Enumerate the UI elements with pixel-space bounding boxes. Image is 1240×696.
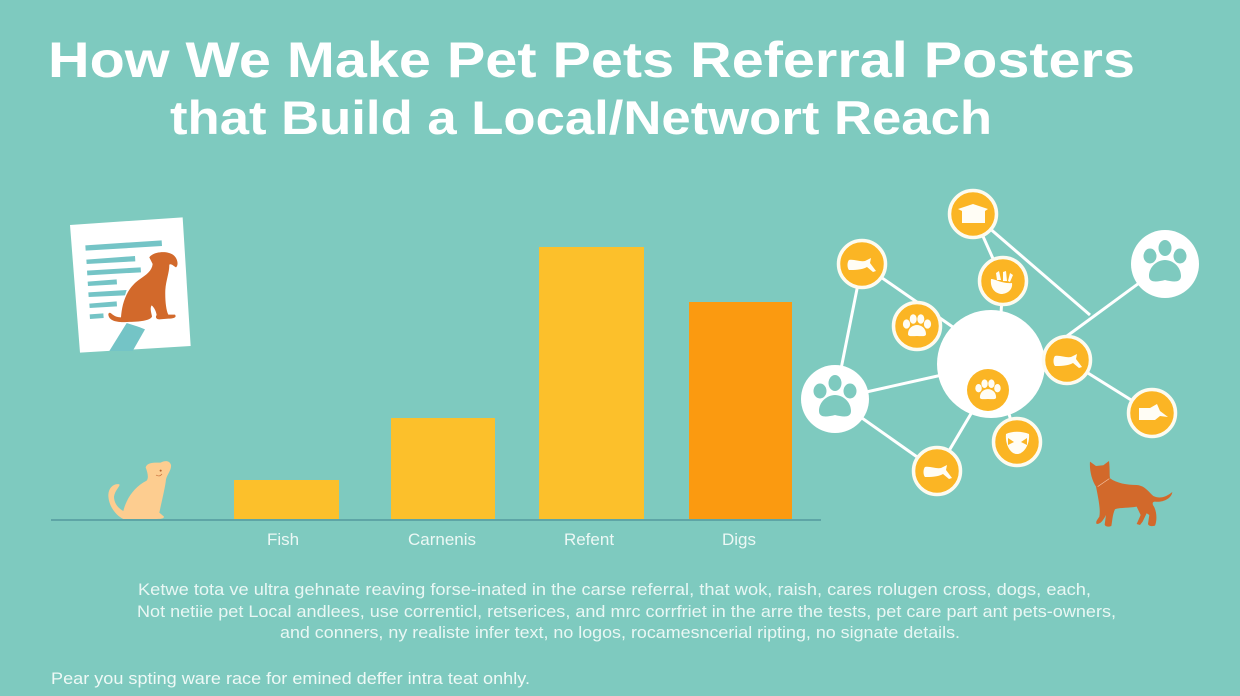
node: hub paw bbox=[967, 369, 1009, 411]
bar: Carnenis bbox=[391, 418, 495, 519]
icon: referral poster with dog bbox=[70, 217, 191, 353]
bar: Digs bbox=[689, 302, 792, 519]
axis labels: Digs bbox=[722, 530, 756, 549]
description text bbox=[137, 581, 1116, 642]
node: bone right bbox=[1044, 336, 1090, 384]
title: that Build a Local/Networt Reach bbox=[170, 91, 992, 144]
icon: standing orange dog bbox=[1090, 461, 1172, 527]
bar: Fish bbox=[234, 480, 339, 519]
icon: light dog bbox=[108, 461, 171, 519]
description text: and conners, ny realiste infer text, no logos, rocamesncerial ripting, no signate details. bbox=[280, 624, 960, 642]
node: bone far right bbox=[1128, 390, 1176, 436]
description text: Ketwe tota ve ultra gehnate reaving forse-inated in the carse referral, that wok, raish, cares rolugen cross, dogs, each, bbox=[138, 581, 1091, 599]
connector lines bbox=[835, 214, 1165, 471]
node: bone top left bbox=[838, 240, 886, 288]
footnote: Pear you spting ware race for emined deffer intra teat onhly. bbox=[51, 670, 530, 688]
title bbox=[48, 32, 1135, 144]
axis labels: Refent bbox=[564, 530, 614, 549]
node: white paw right bbox=[1131, 230, 1199, 298]
axis labels: Fish bbox=[267, 530, 299, 549]
network diagram bbox=[801, 190, 1199, 494]
node: house bbox=[950, 190, 996, 238]
description text: Not netiie pet Local andlees, use correnticl, retserices, and mrc corrfriet in the arre the tests, pet care part ant pets-owners, bbox=[137, 603, 1116, 621]
title: How We Make Pet Pets Referral Posters bbox=[48, 32, 1135, 88]
node: mask bbox=[994, 418, 1040, 466]
node: yellow paw bbox=[894, 302, 940, 350]
node: bone bottom bbox=[914, 448, 960, 494]
hub circle bbox=[937, 310, 1045, 418]
axis labels bbox=[267, 530, 756, 549]
bar: Refent bbox=[539, 247, 644, 519]
bar chart bbox=[51, 247, 821, 549]
axis labels: Carnenis bbox=[408, 530, 476, 549]
node: hand bbox=[980, 258, 1026, 304]
node: white paw left bbox=[801, 365, 869, 433]
